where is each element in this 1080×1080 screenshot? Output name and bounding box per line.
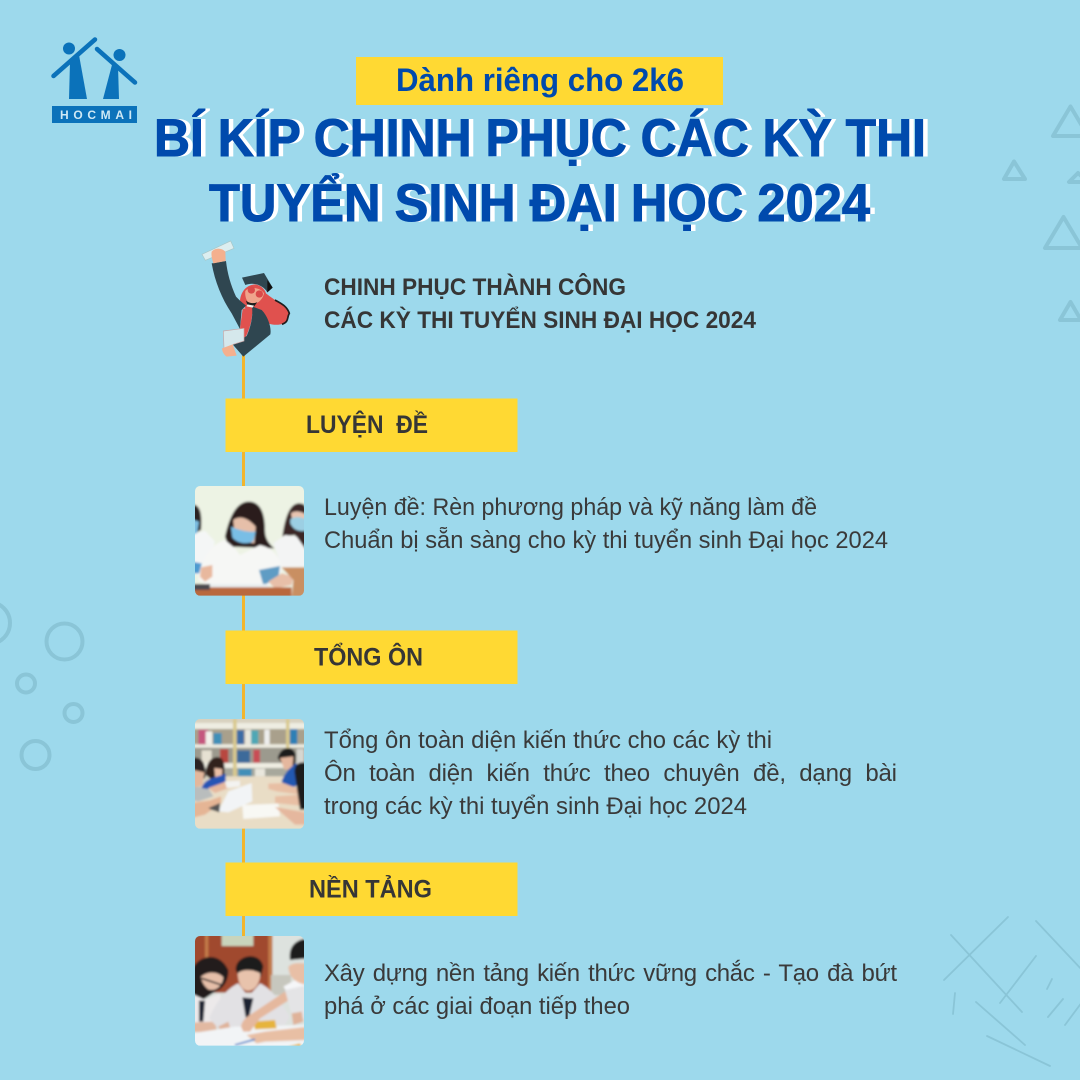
step heading: luyện đề xyxy=(226,398,518,452)
step text: nền tảng: Xây dựng nền tảng kiến thức vững chắc - Tạo đà bứt xyxy=(324,960,897,987)
badge: audience: Dành riêng cho 2k6 xyxy=(396,62,684,98)
badge: audience xyxy=(356,57,723,105)
decoration: triangles xyxy=(1004,106,1080,320)
title: BÍ KÍP CHINH PHỤC CÁC KỲ THI xyxy=(158,108,930,168)
icon: two people forming a roof xyxy=(54,40,135,99)
step heading: nền tảng: NỀN TẢNG xyxy=(309,874,432,904)
photo: students working together xyxy=(195,936,304,1046)
logo wordmark: HOCMAI xyxy=(60,108,132,122)
logo: HOCMAI xyxy=(52,40,137,123)
title: BÍ KÍP CHINH PHỤC CÁC KỲ THI xyxy=(154,108,926,168)
step heading: nền tảng xyxy=(226,862,518,916)
step text: tổng ôn: Ôn toàn diện kiến thức theo chuyên đề, dạng bài xyxy=(324,759,897,787)
timeline line xyxy=(242,350,245,940)
step text: nền tảng: phá ở các giai đoạn tiếp theo xyxy=(324,993,630,1020)
step text: tổng ôn xyxy=(324,727,897,820)
title: TUYỂN SINH ĐẠI HỌC 2024 xyxy=(209,173,870,233)
step text: nền tảng xyxy=(324,960,897,1020)
decoration: circles xyxy=(0,602,82,769)
icon: graduate with diploma xyxy=(202,241,289,357)
title: TUYỂN SINH ĐẠI HỌC 2024 xyxy=(214,173,875,233)
intro heading: CÁC KỲ THI TUYỂN SINH ĐẠI HỌC 2024 xyxy=(324,306,757,334)
step heading: luyện đề: LUYỆN ĐỀ xyxy=(306,409,428,439)
photo: student wearing mask xyxy=(195,486,304,596)
step heading: tổng ôn xyxy=(226,630,518,684)
step text: tổng ôn: trong các kỳ thi tuyển sinh Đại học 2024 xyxy=(324,793,747,820)
step heading: tổng ôn: TỔNG ÔN xyxy=(314,642,423,672)
decoration: crossing lines xyxy=(944,917,1080,1066)
intro heading: CHINH PHỤC THÀNH CÔNG xyxy=(324,273,626,301)
step text: luyện đề: Luyện đề: Rèn phương pháp và kỹ năng làm đề xyxy=(324,494,817,521)
step text: luyện đề: Chuẩn bị sẵn sàng cho kỳ thi tuyển sinh Đại học 2024 xyxy=(324,526,888,554)
step text: tổng ôn: Tổng ôn toàn diện kiến thức cho các kỳ thi xyxy=(324,727,772,754)
step text: luyện đề xyxy=(324,494,888,554)
intro heading xyxy=(324,273,757,334)
photo: students in library xyxy=(195,719,304,829)
title xyxy=(154,108,930,233)
